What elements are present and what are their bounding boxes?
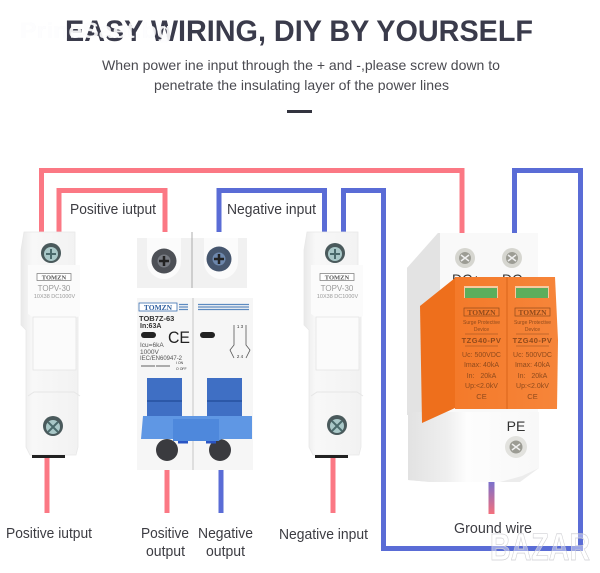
circuit breaker: In:63A [140, 323, 161, 330]
surge protective device: CE [527, 392, 538, 401]
circuit breaker: I ON [176, 361, 184, 365]
surge protective device [407, 233, 558, 482]
fuse holder right: TOPV-30 [321, 284, 354, 293]
PE label: PE [507, 418, 525, 434]
circuit breaker: Icu=6kA [140, 342, 164, 349]
screw [206, 246, 232, 272]
label: positive iutput bottom: Positive iutput [6, 526, 92, 542]
subtitle [102, 57, 500, 93]
wiring diagram [42, 170, 580, 548]
screw [455, 248, 475, 268]
label: negative input bottom: Negative input [279, 527, 368, 543]
screw [505, 436, 527, 458]
red wire: bottom left [44, 455, 50, 513]
circuit breaker: 2 4 [237, 354, 244, 359]
screw [502, 248, 522, 268]
red wire: breaker positive output [164, 468, 170, 513]
blue wire: negative to breaker [219, 190, 324, 232]
surge protective device: Device [474, 327, 489, 333]
surge protective device: Surge Protective [463, 320, 500, 326]
subtitle: When power ine input through the + and -,please screw down to [102, 57, 500, 73]
bottom labels [6, 521, 532, 560]
circuit breaker: 1000V [140, 349, 159, 356]
surge protective device: DC- [502, 271, 527, 287]
screw [43, 416, 63, 436]
surge protective device: Surge Protective [514, 320, 551, 326]
surge protective device: In: 20kA [518, 373, 548, 380]
surge protective device: CE [476, 392, 487, 401]
surge protective device: Up:<2.0kV [465, 383, 498, 390]
subtitle: penetrate the insulating layer of the power lines [154, 77, 449, 93]
surge protective device: In: 20kA [467, 373, 497, 380]
circuit breaker: CE [168, 328, 190, 347]
fuse holder left: TOPV-30 [38, 284, 71, 293]
circuit breaker: TOB7Z-63 [139, 314, 174, 323]
circuit breaker: TOMZN [144, 303, 173, 312]
screw [41, 243, 61, 263]
label: positive output line 1: Positive [141, 526, 189, 542]
label: positive iutput top: Positive iutput [70, 202, 156, 218]
surge protective device: TZG40-PV [462, 336, 501, 345]
circuit breaker: 1 3 [237, 324, 244, 329]
label: positive output line 2: output [146, 544, 185, 560]
label: negative input top: Negative input [227, 202, 316, 218]
fuse holder left [21, 232, 80, 458]
surge protective device: Up:<2.0kV [516, 383, 549, 390]
fuse holder right: 10X38 DC1000V [317, 294, 358, 300]
surge protective device: Device [525, 327, 540, 333]
ground wire [488, 482, 494, 514]
orange module [420, 278, 455, 423]
surge protective device: Imax: 40kA [515, 362, 550, 369]
surge protective device: Imax: 40kA [464, 362, 499, 369]
circuit breaker [137, 232, 253, 470]
screw [327, 415, 347, 435]
title: EASY WIRING, DIY BY YOURSELF [65, 15, 533, 48]
watermark: site name: PrineSaet.bg [20, 18, 172, 43]
red wire: outer positive [42, 170, 462, 233]
surge protective device: TOMZN [467, 308, 496, 317]
fuse holder right: TOMZN [325, 274, 350, 282]
screw [156, 439, 178, 461]
surge protective device: Uc: 500VDC [462, 352, 501, 359]
label: negative output line 1: Negative [198, 526, 253, 542]
label: ground wire: Ground wire [454, 521, 532, 537]
red wire: fuse output [330, 455, 336, 513]
blue wire: breaker negative output [218, 468, 224, 513]
circuit breaker: O OFF [176, 367, 187, 371]
surge protective device: TOMZN [518, 308, 547, 317]
screw [209, 439, 231, 461]
fuse holder left: TOMZN [42, 274, 67, 282]
surge protective device: DC+ [452, 271, 480, 287]
surge protective device: Uc: 500VDC [513, 352, 552, 359]
blue handle [141, 416, 252, 441]
title divider dash [287, 110, 312, 113]
fuse holder right [304, 232, 363, 458]
red wire: inner positive [59, 190, 165, 232]
blue wire: long return loop [344, 170, 580, 548]
fuse holder left: 10X38 DC1000V [34, 294, 75, 300]
watermark overlay on title: PrineSaet.bg [20, 18, 172, 43]
circuit breaker: IEC/EN60947-2 [140, 356, 183, 362]
label: negative output line 2: output [206, 544, 245, 560]
screw [325, 243, 345, 263]
surge protective device: TZG40-PV [513, 336, 552, 345]
screw [152, 248, 176, 274]
